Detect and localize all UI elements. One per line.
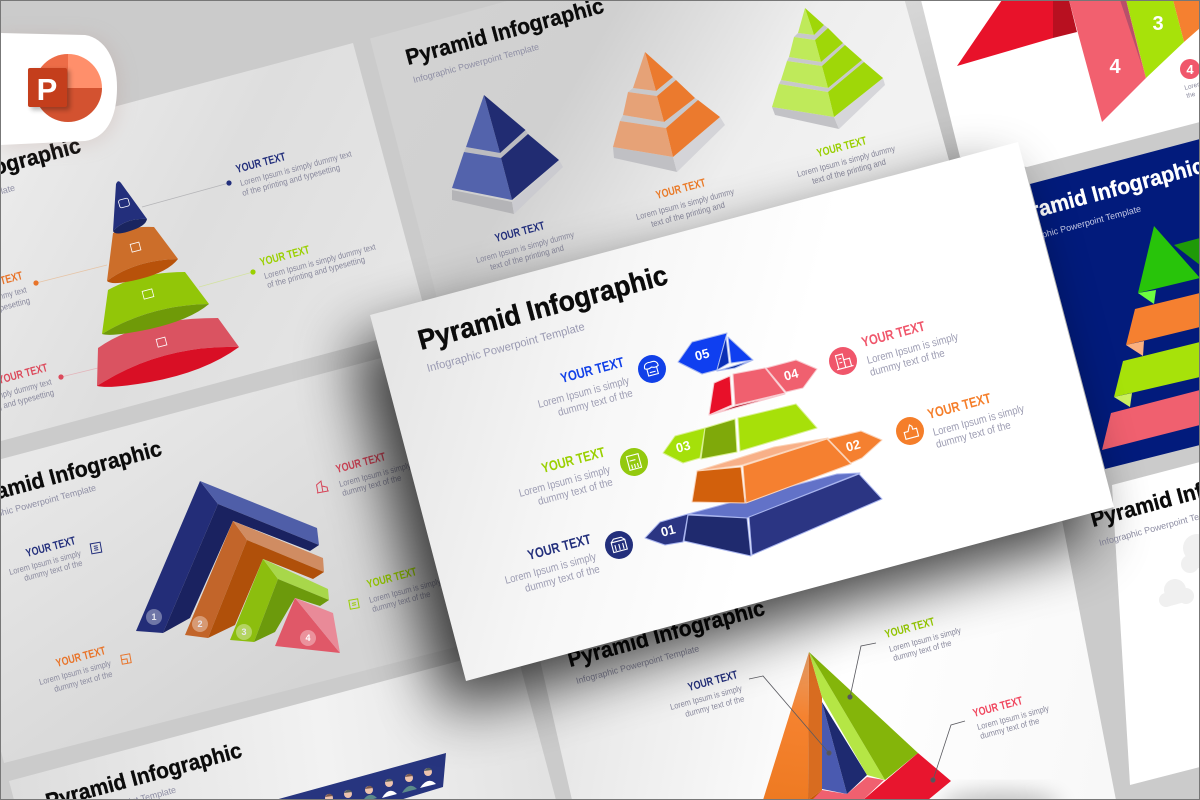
text block: green label: dummy text of the bbox=[537, 476, 614, 508]
text block: navy nested label bbox=[8, 535, 84, 583]
text block: navy nested label: dummy text of the bbox=[23, 558, 84, 583]
text block: navy label: dummy text of the bbox=[524, 563, 601, 595]
text block: red label: dummy text of the bbox=[869, 347, 946, 379]
tier 02 orange: 02 bbox=[844, 436, 862, 455]
text block: green label: of the printing and typesetting bbox=[266, 254, 366, 290]
text block: navy callout: dummy text of the bbox=[684, 693, 746, 719]
chart: ribbons and numbered tiers bbox=[957, 0, 1200, 122]
text block: navy callout bbox=[669, 669, 746, 719]
chart: ribbons and numbered tiers: 4 bbox=[1186, 62, 1194, 77]
text block: green pyramid label: YOUR TEXT bbox=[816, 135, 868, 160]
icon: team portraits bbox=[325, 768, 436, 800]
text block: blue label: Lorem Ipsum is simply bbox=[537, 375, 631, 411]
text block: navy pyramid label bbox=[475, 220, 576, 272]
text block: orange nested label bbox=[38, 645, 114, 694]
text block: orange pyramid label: YOUR TEXT bbox=[655, 177, 707, 202]
text block: blue label: dummy text of the bbox=[557, 387, 634, 419]
text block: navy label: YOUR TEXT bbox=[526, 531, 593, 563]
icon: red building bbox=[829, 347, 857, 375]
text block: red callout: dummy text of the bbox=[979, 715, 1041, 741]
text block: blue label: YOUR TEXT bbox=[559, 354, 626, 386]
chart: layered 3D pyramid bbox=[763, 652, 951, 800]
panel: lower-right white slide bbox=[1088, 455, 1200, 785]
text block: red label bbox=[0, 362, 55, 423]
text block: red callout bbox=[972, 695, 1051, 741]
text block: red callout: YOUR TEXT bbox=[972, 695, 1024, 720]
text block: green nested label bbox=[366, 566, 443, 614]
text block: navy nested label: YOUR TEXT bbox=[25, 535, 77, 560]
tier 01 navy: 01 bbox=[659, 521, 677, 540]
panel: bottom-centre slide with layered pyramid bbox=[540, 520, 1116, 800]
chart: nested chevron pyramid bbox=[136, 481, 340, 653]
chart: stacked cone pyramid bbox=[97, 181, 239, 387]
banner: navy team strip bbox=[275, 753, 446, 800]
panel: central slide with main pyramid bbox=[370, 142, 1114, 681]
callout lines and dots bbox=[749, 643, 965, 782]
chart: banded pyramid on navy bbox=[1102, 226, 1200, 450]
text block: green nested label: Lorem Ipsum is simply bbox=[368, 576, 443, 605]
text block: navy nested label: Lorem Ipsum is simply bbox=[8, 548, 83, 577]
panel: bottom-left slide with team row bbox=[9, 646, 556, 800]
text block: green callout: Lorem Ipsum is simply bbox=[888, 625, 963, 654]
text block: orange label: dummy text of the bbox=[935, 419, 1012, 451]
text block: red label: Lorem Ipsum is simply bbox=[866, 331, 960, 367]
icon: red building bbox=[315, 480, 329, 493]
text block: green nested label: YOUR TEXT bbox=[366, 566, 418, 591]
text block: navy pyramid label: Lorem Ipsum is simply dummy bbox=[475, 229, 576, 265]
panel: top-left slide with cone pyramid bbox=[0, 43, 429, 444]
text block: red nested label: Lorem Ipsum is simply bbox=[338, 460, 413, 489]
tier 02 orange bbox=[692, 431, 882, 503]
tier 03 green bbox=[663, 404, 817, 463]
icon: blue store bbox=[638, 355, 666, 383]
tier 04 red bbox=[709, 360, 817, 415]
text block: green callout bbox=[884, 616, 963, 663]
subtitle: navy slide: Infographic Powerpoint Template bbox=[1014, 204, 1142, 247]
text block: orange pyramid label: text of the printing and bbox=[650, 200, 726, 229]
chart: ribbons and numbered tiers: 3 bbox=[1152, 13, 1164, 35]
text block: orange nested label: dummy text of the bbox=[53, 669, 114, 694]
text block: navy label: Lorem Ipsum is simply bbox=[504, 551, 598, 587]
text block: navy label: of the printing and typesetting bbox=[241, 162, 341, 198]
subtitle: three pyramids slide: Infographic Powerpoint Template bbox=[412, 42, 540, 85]
chart: nested chevron pyramid: 2 bbox=[197, 619, 203, 629]
text block: green label: Lorem Ipsum is simply dummy text bbox=[263, 241, 377, 281]
text block: orange nested label: YOUR TEXT bbox=[55, 645, 107, 670]
text block: red nested label bbox=[335, 451, 413, 498]
text block: green label: YOUR TEXT bbox=[540, 444, 607, 476]
text block: ribbon label: the bbox=[1186, 91, 1197, 100]
panel: top-centre slide with three pyramids bbox=[370, 0, 960, 310]
text block: green pyramid label: Lorem Ipsum is simply dummy bbox=[796, 143, 897, 179]
chart: green four-tier pyramid bbox=[772, 8, 885, 129]
text block: orange label bbox=[926, 390, 1026, 451]
text block: orange pyramid label: Lorem Ipsum is simply dummy bbox=[635, 186, 736, 222]
text block: orange label: Lorem Ipsum is simply bbox=[932, 403, 1026, 439]
panel: right slide on navy background bbox=[1003, 139, 1200, 469]
text block: orange label bbox=[0, 270, 31, 331]
text block: navy callout: YOUR TEXT bbox=[687, 669, 739, 694]
text block: ribbon label bbox=[1184, 80, 1200, 100]
connector lines and dots bbox=[33, 180, 256, 380]
chart: main layered pyramid bbox=[645, 333, 882, 556]
text block: orange nested label: Lorem Ipsum is simply bbox=[38, 658, 113, 687]
heading: main title: Pyramid Infographic bbox=[415, 259, 671, 356]
icon: navy list bbox=[90, 542, 102, 554]
text block: green callout: YOUR TEXT bbox=[884, 616, 936, 641]
tier 04 red: 04 bbox=[782, 365, 801, 384]
subtitle: main: Infographic Powerpoint Template bbox=[426, 321, 586, 375]
subtitle: layered pyramid slide: Infographic Powerpoint Template bbox=[575, 643, 700, 686]
tier 05 blue bbox=[678, 333, 753, 374]
tier 05 blue: 05 bbox=[693, 345, 711, 364]
text block: orange label: YOUR TEXT bbox=[926, 390, 993, 422]
icon: pale clouds bbox=[1159, 534, 1200, 608]
chart: nested chevron pyramid: 3 bbox=[241, 627, 247, 637]
heading: layered pyramid slide title: Pyramid Infographic bbox=[565, 595, 767, 672]
text block: green nested label: dummy text of the bbox=[371, 589, 432, 614]
chart: orange three-tier pyramid bbox=[613, 52, 725, 172]
tier 01 navy bbox=[645, 473, 882, 556]
text block: red callout: Lorem Ipsum is simply bbox=[976, 703, 1051, 732]
chart: nested chevron pyramid: 4 bbox=[305, 633, 311, 643]
chart: ribbons and numbered tiers: 4 bbox=[1109, 56, 1121, 78]
icon: orange hand bbox=[896, 417, 924, 445]
text block: orange pyramid label bbox=[635, 177, 736, 229]
text block: navy label bbox=[504, 531, 601, 595]
chart: nested chevron pyramid: 1 bbox=[151, 612, 157, 622]
icon: green document bbox=[620, 448, 648, 476]
text block: red label: YOUR TEXT bbox=[860, 318, 927, 350]
panel: left slide with nested chevron pyramid bbox=[0, 345, 530, 763]
text block: navy pyramid label: text of the printing and bbox=[489, 243, 565, 272]
text block: green label: Lorem Ipsum is simply bbox=[518, 464, 612, 500]
text block: navy label: Lorem Ipsum is simply dummy text bbox=[239, 148, 353, 188]
text block: green callout: dummy text of the bbox=[892, 638, 953, 663]
text block: red nested label: dummy text of the bbox=[341, 472, 403, 498]
text block: red label bbox=[860, 318, 960, 379]
text block: green label: YOUR TEXT bbox=[259, 244, 311, 269]
text block: navy pyramid label: YOUR TEXT bbox=[494, 220, 546, 245]
text block: green pyramid label: text of the printing and bbox=[811, 157, 887, 186]
text block: red nested label: YOUR TEXT bbox=[335, 451, 387, 476]
text block: navy callout: Lorem Ipsum is simply bbox=[669, 683, 744, 712]
panel: top-right slide with ribbon pyramid bbox=[921, 0, 1200, 167]
icon: green document bbox=[349, 599, 359, 609]
shadow cast by the central slide bbox=[350, 172, 1094, 711]
badge: PowerPoint logo: P bbox=[37, 72, 57, 107]
badge: PowerPoint logo bbox=[0, 33, 119, 148]
text block: navy label: YOUR TEXT bbox=[235, 151, 287, 176]
icon: navy bank bbox=[605, 531, 633, 559]
chart: navy two-tier pyramid bbox=[452, 95, 563, 214]
tier 03 green: 03 bbox=[674, 437, 692, 456]
text block: blue label bbox=[537, 354, 634, 419]
text block: green label bbox=[518, 444, 614, 508]
icon: orange folder bbox=[121, 654, 131, 664]
